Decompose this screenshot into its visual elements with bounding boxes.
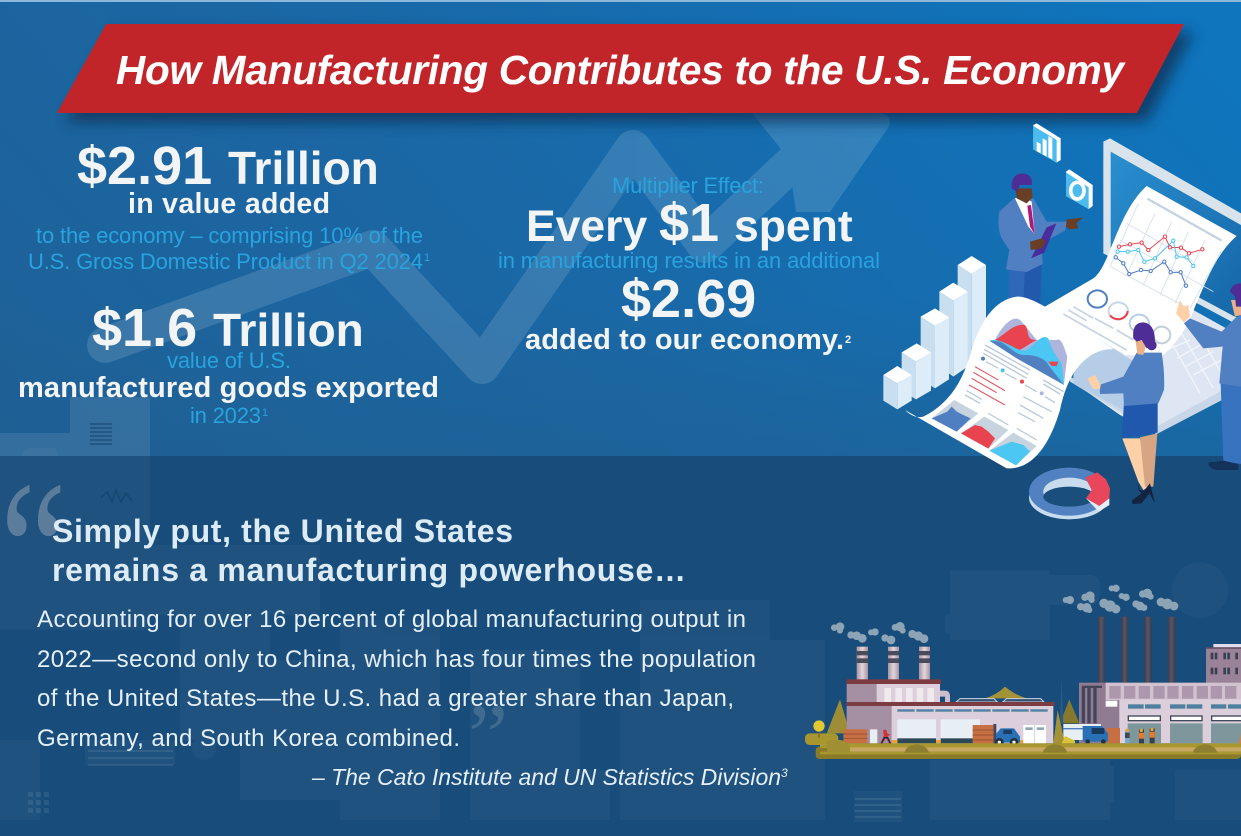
multiplier effect: $2.69 [621, 269, 756, 329]
quote heading: Simply put, the United States [52, 513, 513, 549]
quote body: Accounting for over 16 percent of global manufacturing output in [37, 606, 746, 633]
multiplier effect: in manufacturing results in an additional [498, 248, 880, 273]
background: faint grids [28, 750, 901, 818]
right factory smoke [1063, 585, 1178, 613]
quote attribution: – The Cato Institute and UN Statistics Division [311, 764, 781, 790]
donut chart on floor [1029, 468, 1110, 519]
stat: 1.6 trillion: $1.6 [92, 298, 197, 358]
laptop [1070, 138, 1241, 434]
quote body: of the United States—the U.S. had a greater share than Japan, [37, 685, 734, 712]
quote attribution: 3 [781, 766, 788, 780]
stat: 2.91 trillion: Trillion [228, 142, 379, 194]
multiplier effect: 2 [845, 334, 851, 346]
icon: donut tile [1066, 169, 1093, 209]
stat: 1.6 trillion [18, 298, 439, 428]
decorative closing quote mark: ” [468, 687, 508, 786]
quote body: 2022—second only to China, which has four times the population [37, 646, 756, 673]
background: faint rising arrow [105, 113, 890, 366]
icon: bar chart tile [1033, 123, 1061, 163]
decorative opening quote mark: “ [0, 440, 67, 662]
woman presenter [1087, 322, 1164, 504]
quote body: Germany, and South Korea combined. [37, 725, 460, 752]
area chart [989, 319, 1067, 385]
stat: 2.91 trillion: to the economy – comprising 10% of the [36, 223, 423, 248]
workers [880, 728, 1241, 747]
stat: 2.91 trillion: in value added [128, 188, 330, 220]
stat: 2.91 trillion [28, 136, 430, 274]
left factory [843, 647, 1054, 743]
background: faint tech blocks upper [0, 397, 150, 456]
bar columns [883, 256, 986, 409]
report: lower scroll [905, 297, 1143, 468]
stat: 2.91 trillion: $2.91 [77, 136, 212, 196]
multiplier effect: added to our economy. [525, 324, 844, 356]
quote heading [52, 513, 686, 588]
background: faint tech icons [0, 448, 1241, 822]
man on right [1176, 283, 1241, 470]
stat: 1.6 trillion: 1 [262, 407, 268, 419]
lower dark band [0, 456, 1241, 836]
stat: 1.6 trillion: Trillion [213, 304, 364, 356]
left factory smoke [831, 622, 928, 644]
background: faint icon details [90, 424, 132, 502]
stat: 1.6 trillion: in 2023 [190, 403, 261, 428]
multiplier effect: spent [734, 202, 853, 251]
quote body [37, 606, 756, 752]
multiplier effect: Every [526, 202, 647, 251]
quote heading: remains a manufacturing powerhouse… [52, 552, 686, 588]
ground [805, 720, 1241, 759]
top edge line [0, 0, 1241, 2]
multiplier effect: Multiplier Effect: [612, 173, 764, 198]
report: upper sheet [1045, 186, 1237, 357]
multiplier effect: $1 [659, 193, 719, 253]
stat: 2.91 trillion: U.S. Gross Domestic Product in Q2 2024 [28, 249, 423, 274]
banner shadow [66, 32, 1194, 122]
man with clipboard [998, 173, 1083, 307]
stat: 1.6 trillion: manufactured goods exported [18, 372, 439, 404]
title banner [57, 24, 1184, 113]
title: How Manufacturing Contributes to the U.S. Economy [116, 47, 1126, 93]
stat: 1.6 trillion: value of U.S. [167, 348, 291, 373]
stat: 2.91 trillion: 1 [424, 252, 430, 264]
background hills and trees [827, 678, 1079, 733]
illustration: data analysis team [883, 123, 1241, 519]
right factory [1079, 617, 1241, 743]
illustration: factories [805, 585, 1241, 759]
trucks, forklift, crates [973, 710, 1120, 747]
multiplier effect [498, 173, 880, 356]
